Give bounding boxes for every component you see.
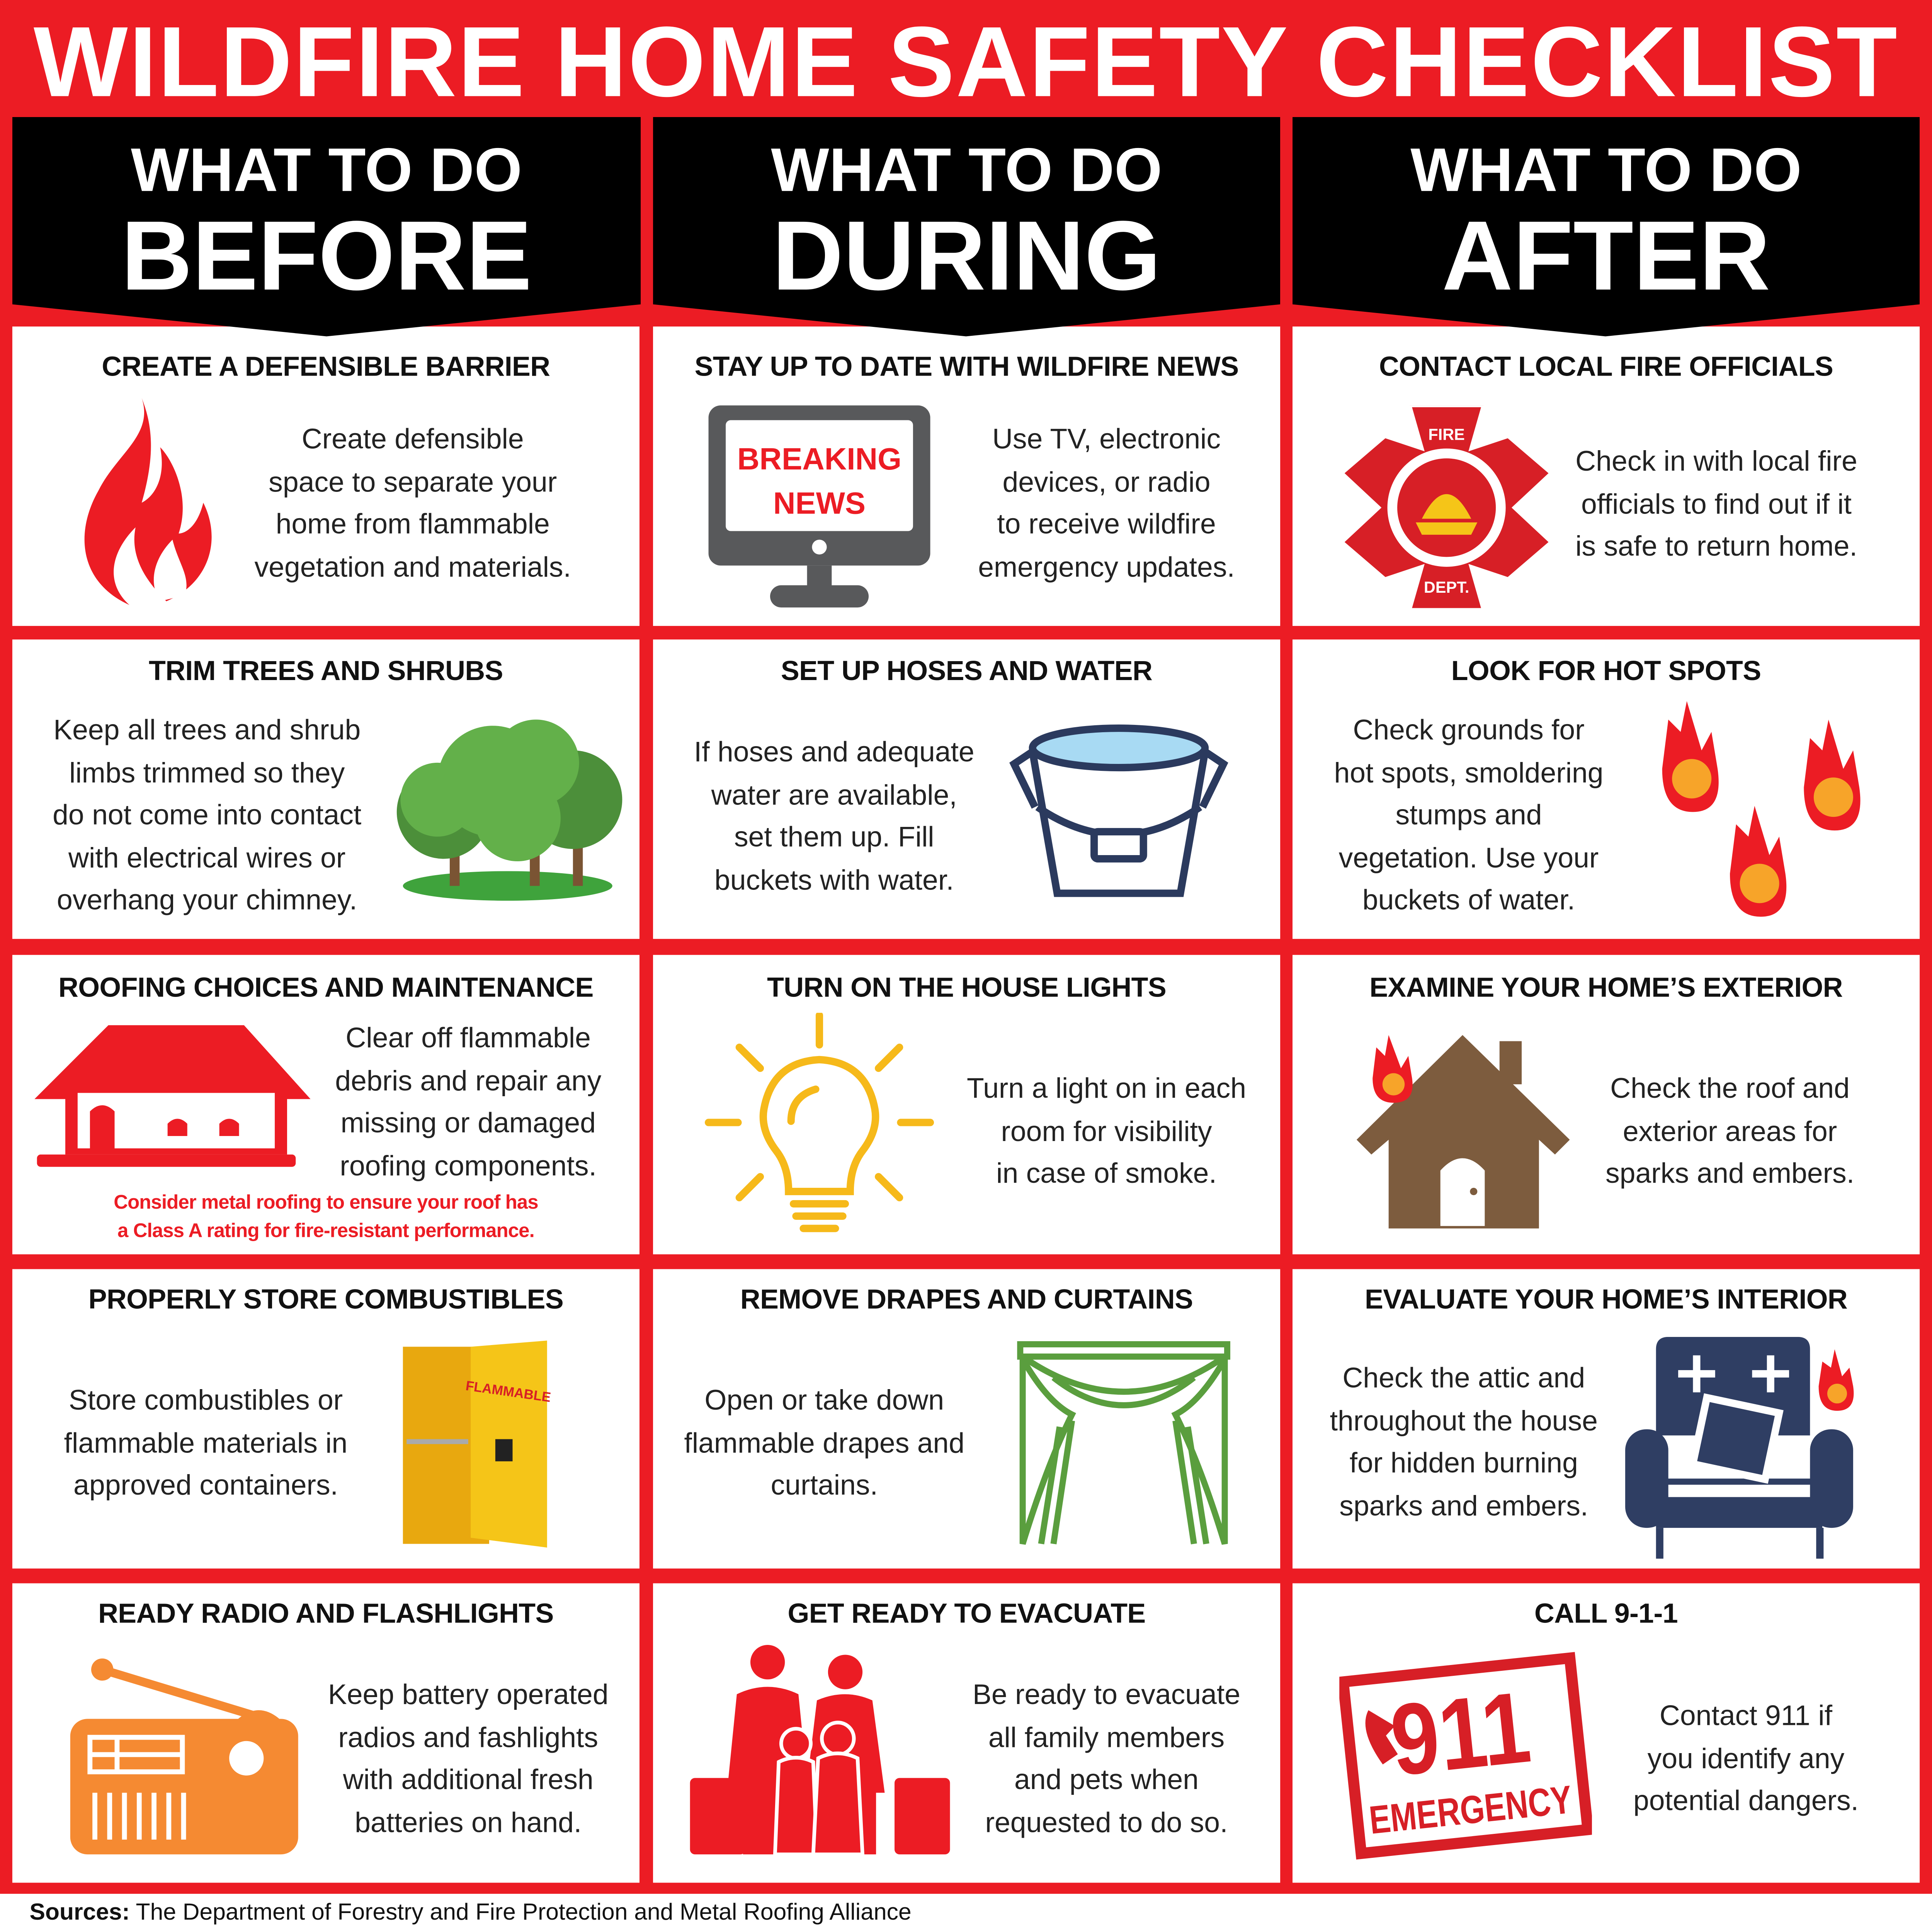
text: If hoses and adequate [694,736,975,768]
text: do not come into contact [53,798,361,830]
text [684,1379,964,1506]
text [1605,1067,1854,1195]
text: Keep all trees and shrub [53,713,361,745]
panel: during row 5 [653,1583,1280,1883]
panel: during row 3 [653,955,1280,1254]
text: Store combustibles or [69,1384,343,1416]
text: potential dangers. [1633,1784,1859,1816]
heading: REMOVE DRAPES AND CURTAINS [740,1284,1193,1315]
header: during [653,117,1280,339]
text: with electrical wires or [68,841,345,873]
footer: sources [0,1894,1932,1932]
text: set them up. Fill [734,821,934,853]
text: roofing components. [340,1149,597,1181]
text: flammable drapes and [684,1426,964,1458]
text: sparks and embers. [1605,1157,1854,1189]
text: room for visibility [1001,1114,1212,1146]
text [978,418,1235,588]
footer: sources: Sources: The Department of Forestry and Fire Protection and Metal Roofing Alliance [30,1900,912,1926]
text: exterior areas for [1623,1114,1837,1146]
heading: READY RADIO AND FLASHLIGHTS [98,1598,554,1629]
title: WILDFIRE HOME SAFETY CHECKLIST [34,7,1898,118]
panel: after row 3 [1293,955,1920,1254]
text: Keep battery operated [328,1678,609,1710]
text: officials to find out if it [1581,487,1852,519]
text: Check in with local fire [1575,445,1857,477]
header: before: WHAT TO DO [131,136,522,204]
text: and pets when [1014,1763,1199,1795]
header: before [12,117,641,339]
panel: after row 5 [1293,1583,1920,1883]
heading: STAY UP TO DATE WITH WILDFIRE NEWS [695,351,1239,382]
panel: after row 4 [1293,1269,1920,1568]
icon: brown house with fire [1354,1029,1573,1232]
header: before: BEFORE [121,201,532,311]
heading: TRIM TREES AND SHRUBS [149,655,503,686]
heading: CALL 9-1-1 [1534,1598,1678,1629]
panel: after row 1 [1293,327,1920,626]
icon: curtains [1017,1340,1232,1550]
text: debris and repair any [335,1064,601,1096]
heading: PROPERLY STORE COMBUSTIBLES [88,1284,563,1315]
text [1334,709,1604,921]
icon: tv breaking news [709,405,930,610]
text: Contact 911 if [1660,1699,1832,1731]
text: water are available, [711,778,957,810]
text: emergency updates. [978,550,1235,582]
text: to receive wildfire [997,508,1216,540]
text: limbs trimmed so they [69,756,345,788]
text [335,1017,601,1187]
text: vegetation. Use your [1339,841,1599,873]
header: during: WHAT TO DO [771,136,1162,204]
heading: GET READY TO EVACUATE [788,1598,1146,1629]
text [1633,1694,1859,1822]
panel: before row 3 [12,955,639,1254]
text: overhang your chimney. [57,883,357,915]
text: Open or take down [704,1384,944,1416]
text: radios and fashlights [338,1721,598,1753]
header: during: DURING [772,201,1161,311]
text: missing or damaged [341,1107,596,1138]
text: curtains. [771,1469,878,1501]
icon: flammable cabinet: FLAMMABLE [465,1378,551,1405]
text: Check grounds for [1353,713,1585,745]
text: home from flammable [276,508,550,540]
text: Turn a light on in each [967,1072,1246,1104]
panel: after row 2 [1293,639,1920,939]
panel: during row 4 [653,1269,1280,1568]
text [1575,440,1857,567]
panel: before row 2 [12,639,639,939]
heading: ROOFING CHOICES AND MAINTENANCE [58,972,594,1003]
text [53,709,361,921]
heading: LOOK FOR HOT SPOTS [1451,655,1761,686]
panel: before row 4 [12,1269,639,1568]
panel: before row 1 [12,327,639,626]
heading: SET UP HOSES AND WATER [781,655,1152,686]
text [973,1673,1240,1843]
icon: hot spot flames [1650,695,1872,923]
header: after: AFTER [1442,201,1770,311]
text: stumps and [1395,798,1542,830]
text: Be ready to evacuate [973,1678,1240,1710]
text [967,1067,1246,1195]
callout: metal roofing note: a Class A rating for fire-resistant performance. [117,1221,534,1242]
icon: bucket [1008,721,1230,903]
text [64,1379,347,1506]
text: Use TV, electronic [992,423,1221,455]
heading: CREATE A DEFENSIBLE BARRIER [102,351,550,382]
callout: metal roofing note: Consider metal roofing to ensure your roof has [114,1193,538,1214]
icon: flame [68,398,222,607]
text: with additional fresh [343,1763,594,1795]
heading: EXAMINE YOUR HOME’S EXTERIOR [1369,972,1843,1003]
text: requested to do so. [985,1806,1228,1838]
text [254,418,571,588]
text: approved containers. [73,1469,338,1501]
icon: red house [34,1025,313,1170]
icon: 911 emergency stamp [1339,1651,1592,1863]
text: sparks and embers. [1339,1489,1588,1521]
panel: before row 5 [12,1583,639,1883]
text: Create defensible [302,423,524,455]
icon: fire dept badge: DEPT. [1424,578,1469,596]
icon: light bulb [705,1013,934,1235]
callout: metal roofing note [12,1189,639,1246]
heading: CONTACT LOCAL FIRE OFFICIALS [1379,351,1833,382]
heading: EVALUATE YOUR HOME’S INTERIOR [1365,1284,1847,1315]
header: after: WHAT TO DO [1410,136,1802,204]
text [328,1673,609,1843]
text: you identify any [1648,1742,1844,1774]
text: space to separate your [269,465,557,497]
text: vegetation and materials. [254,550,571,582]
icon: flammable cabinet [397,1340,551,1553]
text: flammable materials in [64,1426,347,1458]
text: Clear off flammable [345,1021,591,1053]
text [1330,1357,1598,1527]
icon: family with luggage [687,1645,952,1857]
icon: tv breaking news: BREAKING [737,442,901,476]
icon: trees [388,713,628,905]
text: Check the roof and [1610,1072,1850,1104]
text: throughout the house [1330,1404,1598,1436]
icon: fire dept badge [1342,405,1551,610]
text: hot spots, smoldering [1334,756,1604,788]
icon: armchair with fire [1625,1337,1859,1561]
text: buckets with water. [714,863,954,895]
header: after [1293,117,1920,339]
text: batteries on hand. [355,1806,582,1838]
text: for hidden burning [1350,1447,1578,1479]
text: devices, or radio [1002,465,1211,497]
text: buckets of water. [1362,883,1575,915]
text [694,731,975,901]
panel: during row 2 [653,639,1280,939]
text: is safe to return home. [1575,530,1857,562]
text: all family members [988,1721,1225,1753]
icon: tv breaking news: NEWS [773,486,866,520]
text: Check the attic and [1342,1362,1585,1394]
heading: TURN ON THE HOUSE LIGHTS [767,972,1166,1003]
icon: fire dept badge: FIRE [1428,425,1465,443]
panel: during row 1 [653,327,1280,626]
icon: radio [68,1655,302,1858]
text: in case of smoke. [996,1157,1217,1189]
icon: 911 emergency stamp: 911 [1386,1670,1535,1797]
